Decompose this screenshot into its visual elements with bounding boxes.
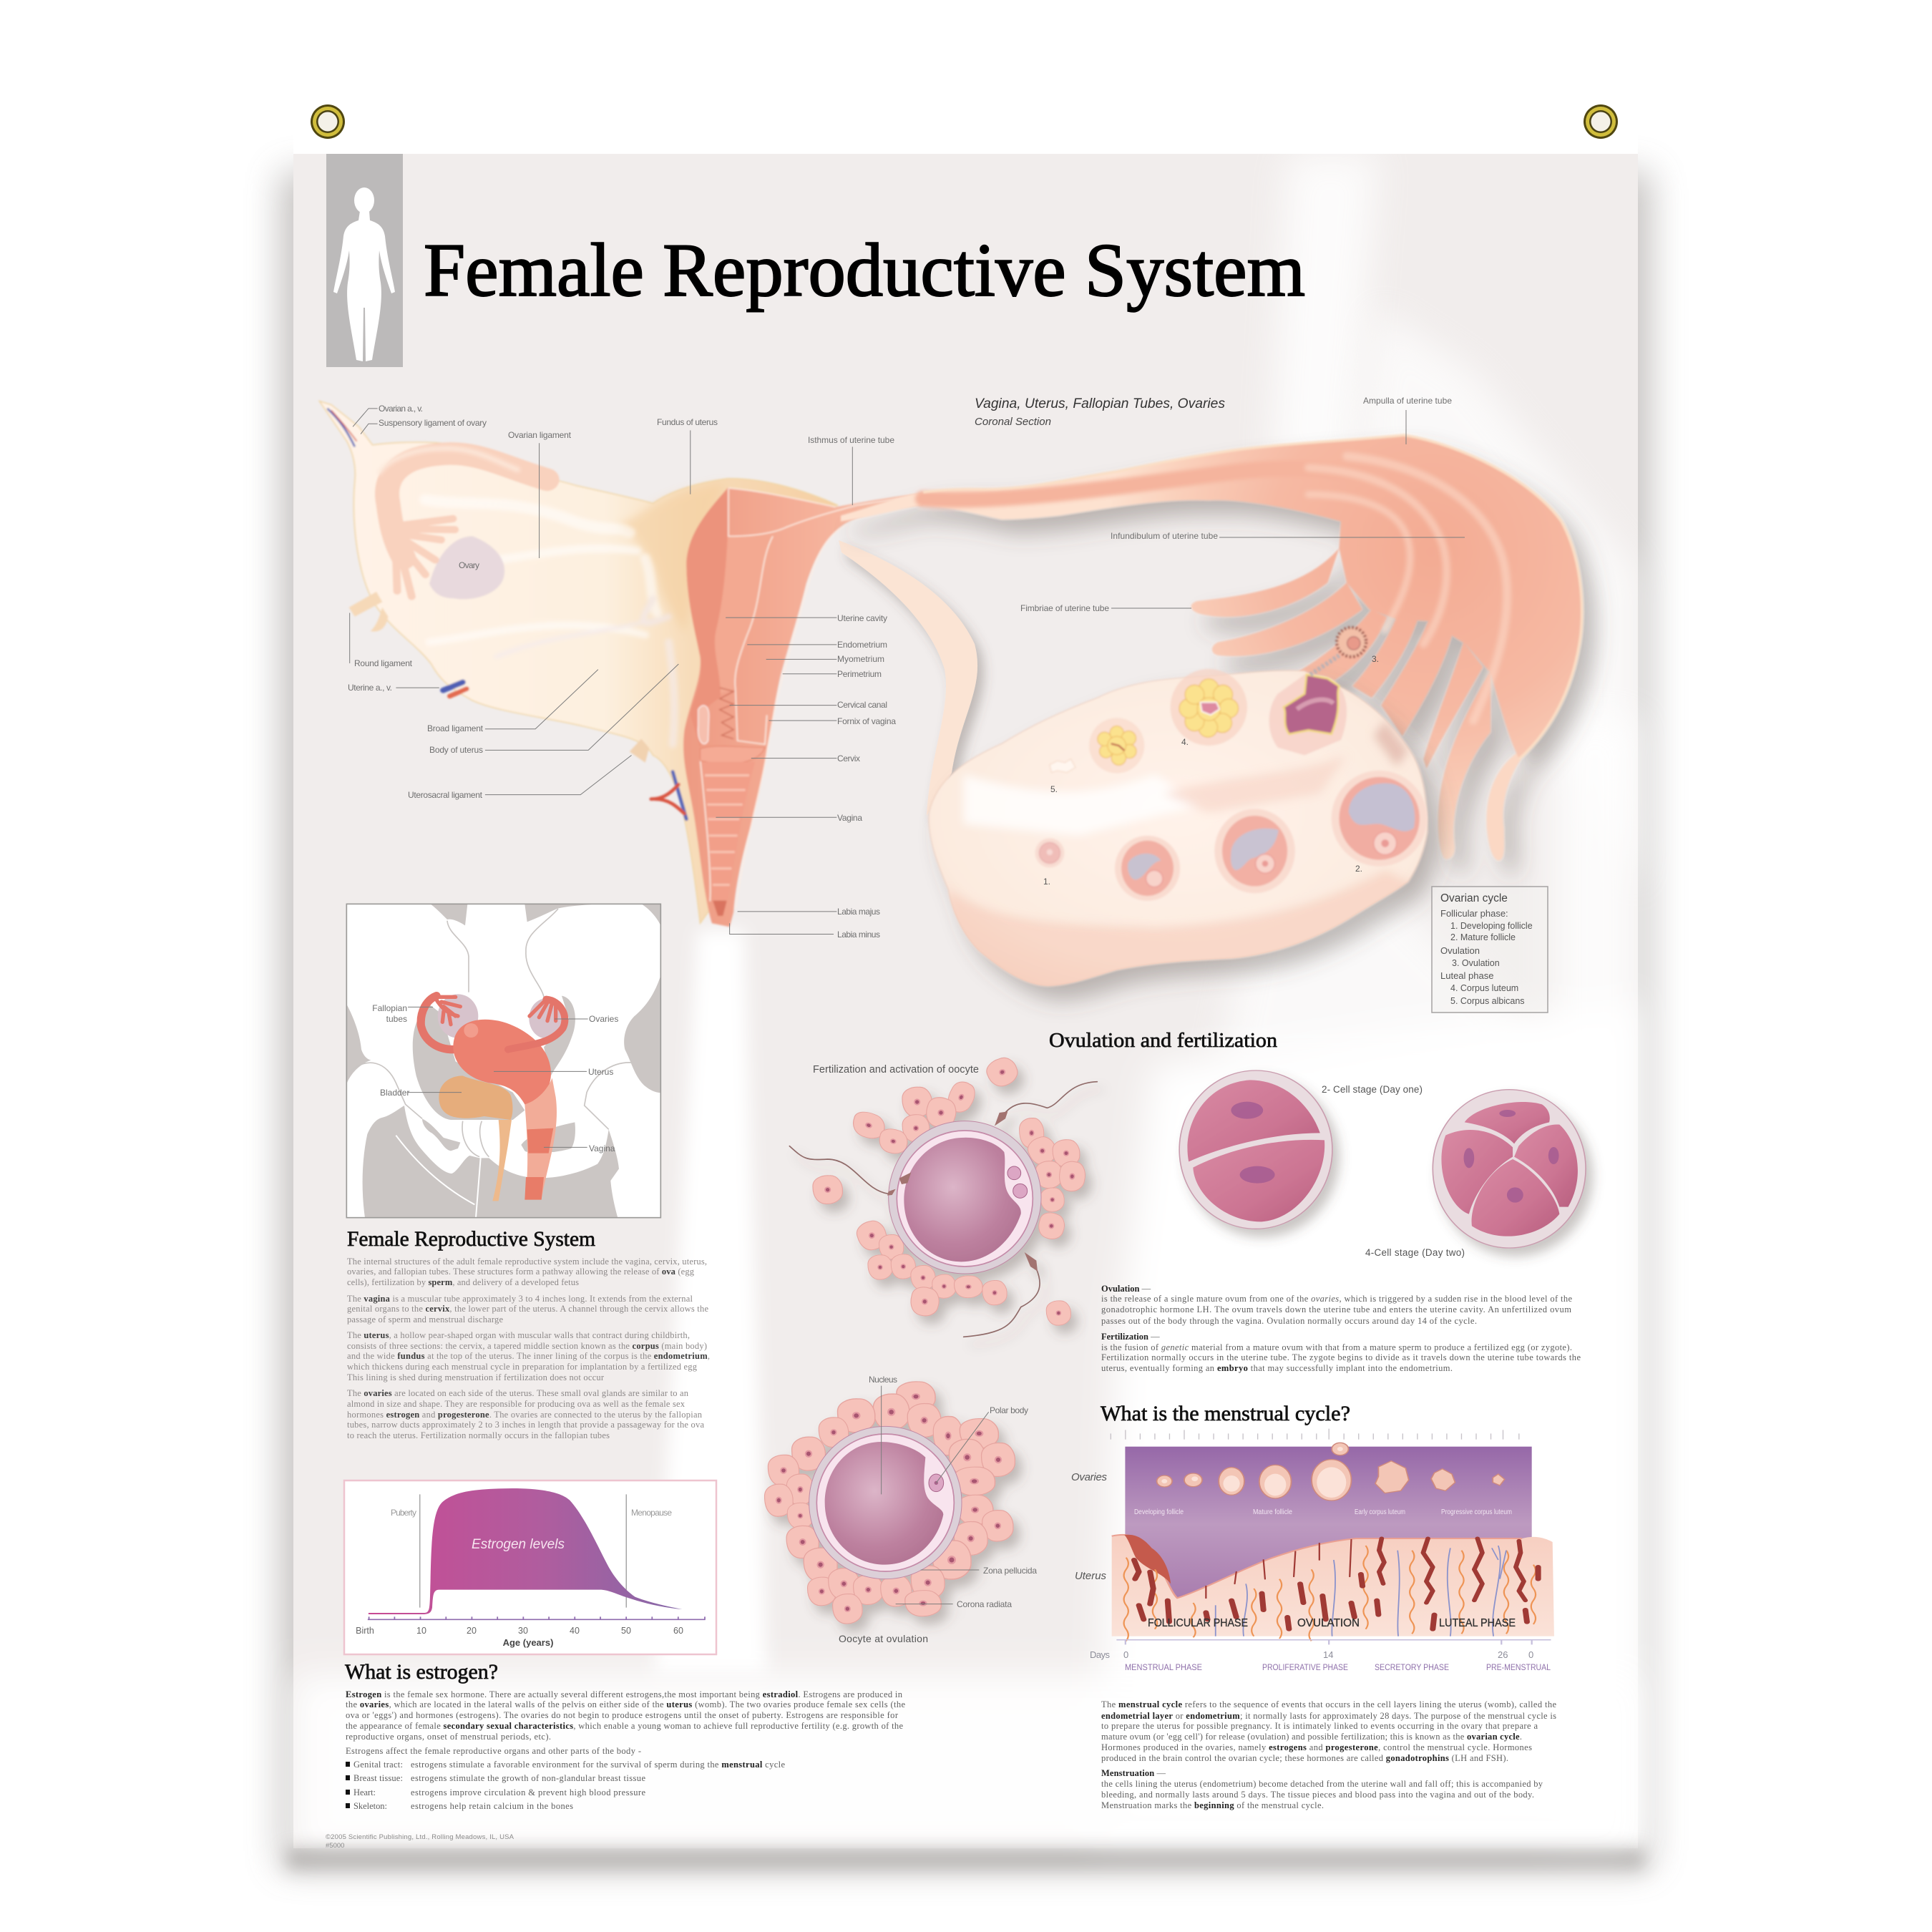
heading: menstrual cycle: What is the menstrual cycle? <box>1101 1402 1350 1425</box>
row labels: Uterus <box>1075 1570 1106 1582</box>
corpus luteum large <box>1171 669 1247 746</box>
labels: uterus diagram <box>348 404 896 940</box>
copyright: #5000 <box>326 1842 344 1850</box>
illustration: oocyte at ovulation <box>765 1382 1015 1624</box>
inset labels: tubes <box>386 1014 407 1024</box>
inset labels: Uterus <box>588 1067 613 1077</box>
bottom edge shadow <box>286 1848 1645 1870</box>
day ticks <box>1111 1429 1519 1440</box>
ovary band <box>1125 1447 1532 1601</box>
text block: overview: The vagina is a muscular tube approximately 3 to 4 inches long. It extends from the external <box>347 1294 693 1304</box>
copyright <box>326 1833 514 1850</box>
corona radiata cells <box>765 1382 1015 1624</box>
body silhouette panel <box>326 154 403 367</box>
chart: estrogen levels: Age (years) <box>503 1637 553 1648</box>
finger 5 <box>1381 619 1452 736</box>
ovum <box>1337 628 1366 657</box>
chart labels: 60 <box>673 1626 683 1636</box>
text block: overview: consists of three sections: the cervix, a tapered middle section known as the corpus (main body) <box>347 1341 707 1351</box>
title: Female Reproductive System <box>424 228 1305 312</box>
axis <box>368 1616 706 1619</box>
tube inner band <box>923 469 1377 499</box>
text block: overview: almond in size and shape. They are responsible for producing ova as well as the female sex <box>347 1399 686 1409</box>
follicle labels <box>1134 1508 1512 1516</box>
text block: ovulation and fertilization: Fertilization normally occurs in the uterine tube. The zygote begins to divide as it travels down the uterine tube towards the <box>1101 1352 1581 1362</box>
labels: uterus diagram: Uterine cavity <box>837 613 887 623</box>
illustration: 2-cell embryo <box>1179 1070 1332 1229</box>
chart: estrogen levels: Puberty <box>391 1508 416 1518</box>
legend: ovarian cycle: Follicular phase: <box>1440 908 1508 919</box>
uterine vessels <box>443 682 467 696</box>
labels: uterus diagram: Uterine a., v. <box>348 683 392 693</box>
text block: overview: This lining is shed during menstruation if fertilization does not occur <box>347 1372 605 1382</box>
follicle labels: Developing follicle <box>1134 1508 1184 1516</box>
text block: overview: passage of sperm and menstrual discharge <box>347 1314 503 1324</box>
text block: menstrual cycle: Menstruation — <box>1101 1768 1166 1778</box>
phase labels: OVULATION <box>1297 1617 1360 1629</box>
cycle phases: SECRETORY PHASE <box>1375 1664 1449 1672</box>
text block: ovulation and fertilization: Fertilization — <box>1101 1332 1160 1342</box>
ovary numbers: 4. <box>1181 737 1189 747</box>
labia <box>713 901 727 916</box>
finger 4 <box>1352 617 1418 698</box>
legend: ovarian cycle: 1. Developing follicle <box>1450 921 1533 931</box>
labels: uterus diagram: Fornix of vagina <box>837 716 896 726</box>
polar body <box>929 1474 944 1492</box>
zona <box>809 1426 962 1579</box>
labels: uterus diagram: Ovarian a., v. <box>379 404 423 414</box>
tube leader lines <box>1111 410 1465 608</box>
embryo labels <box>1322 1084 1465 1258</box>
chart labels: 30 <box>518 1626 528 1636</box>
text block: menstrual cycle: to prepare the uterus for possible pregnancy. It is intimately linked to events occurring in the ovary that prepare a <box>1101 1721 1538 1731</box>
follicles <box>1157 1443 1505 1501</box>
blue vessels <box>1216 1546 1506 1636</box>
text block: overview: which thickens during each menstrual cycle in preparation for implantation by a fertilized egg <box>347 1362 698 1372</box>
sperm <box>789 1082 1097 1337</box>
phase labels: LUTEAL PHASE <box>1439 1617 1516 1629</box>
bullet list: estrogen effects: estrogens improve circulation & prevent high blood pressure <box>411 1787 645 1797</box>
heading: what is estrogen: What is estrogen? <box>345 1661 498 1684</box>
follicle labels: Progressive corpus luteum <box>1441 1508 1512 1516</box>
text block: ovulation and fertilization: uterus, eventually forming an embryo that may successfully implant into the endometrium. <box>1101 1363 1453 1373</box>
text block: menstrual cycle: Hormones produced in the ovaries, namely estrogens and progesterone, control the menstrual cycle. Hormones <box>1101 1742 1532 1752</box>
heading: ovulation and fertilization: Ovulation and fertilization <box>1049 1029 1278 1052</box>
poster sheet <box>293 100 1638 1860</box>
text block: ovulation and fertilization: passes out of the body through the vagina. Ovulation normally occurs around day 14 of the cycle. <box>1101 1316 1477 1326</box>
inset labels <box>372 1003 618 1153</box>
text block: menstrual cycle: endometrial layer or endometrium; it normally lasts for approximately 28 days. The purpose of the menstrual cycle is <box>1101 1711 1556 1721</box>
ligament stub lower <box>630 739 649 763</box>
uterine tissue <box>1112 1535 1554 1636</box>
ruptured follicle <box>1269 675 1347 755</box>
day labels: 26 <box>1498 1649 1508 1660</box>
labels: uterus diagram: Ovarian ligament <box>508 430 572 440</box>
text block: overview: genital organs to the cervix, the lower part of the uterus. A channel through the cervix allows the <box>347 1304 708 1314</box>
tube labels: Infundibulum of uterine tube <box>1111 531 1218 541</box>
shedding lining <box>1125 1535 1171 1584</box>
text block: menstrual cycle: the cells lining the uterus (endometrium) become detached from the uterine wall and fall off; this is accompanied by <box>1101 1779 1543 1789</box>
inset labels: Ovaries <box>589 1014 618 1024</box>
ovary follicles <box>1035 628 1428 901</box>
bullet list: estrogen effects: estrogens help retain calcium in the bones <box>411 1801 573 1811</box>
section note: Coronal Section <box>975 416 1051 428</box>
legend: ovarian cycle: Luteal phase <box>1440 970 1493 981</box>
text block: overview: to reach the uterus. Fertilization normally occurs in the fallopian tubes <box>347 1430 610 1440</box>
subtitle: Vagina, Uterus, Fallopian Tubes, Ovaries <box>975 396 1225 411</box>
phase labels <box>1148 1617 1516 1629</box>
labels: uterus diagram: Uterosacral ligament <box>408 790 483 800</box>
follicle details <box>1161 1447 1346 1498</box>
chart: estrogen levels: Menopause <box>631 1508 672 1518</box>
oocyte labels: Oocyte at ovulation <box>839 1633 928 1644</box>
text block: estrogen: the appearance of female secondary sexual characteristics, which enable a young woman to achieve full reproductive fertility (e.g. growth of the <box>346 1721 903 1731</box>
tube labels: Fimbriae of uterine tube <box>1020 603 1109 613</box>
text block: menstrual cycle: Menstruation marks the beginning of the menstrual cycle. <box>1101 1800 1324 1810</box>
bullet list: estrogen effects: Heart: <box>353 1787 376 1797</box>
left tube and fimbriae <box>387 454 547 597</box>
follicle mid <box>1214 809 1295 893</box>
uterus leader lines <box>350 409 852 935</box>
text block: overview: and the wide fundus at the top of the uterus. The inner lining of the corpus is the endometrium, <box>347 1351 710 1361</box>
day labels <box>1090 1649 1533 1660</box>
oocyte labels: Polar body <box>990 1405 1028 1415</box>
bullet list: estrogen effects: estrogens stimulate the growth of non-glandular breast tissue <box>411 1773 645 1783</box>
oocyte labels: Zona pellucida <box>983 1566 1037 1576</box>
labels: uterus diagram: Broad ligament <box>427 723 484 733</box>
row labels <box>1071 1471 1108 1582</box>
chart labels: Birth <box>356 1626 374 1636</box>
bullet list: estrogen effects <box>346 1760 785 1811</box>
inset frame <box>346 904 660 1218</box>
text block: estrogen <box>346 1689 905 1756</box>
legend: ovarian cycle: 5. Corpus albicans <box>1450 996 1525 1006</box>
endometrium lines <box>701 488 923 909</box>
text block: ovulation and fertilization: is the release of a single mature ovum from one of the ovaries, which is triggered by a sudden rise in the blood level of the <box>1101 1294 1572 1304</box>
ligament fibres <box>426 499 674 744</box>
text block: menstrual cycle <box>1101 1699 1556 1810</box>
oocyte labels <box>839 1375 1037 1644</box>
cervix <box>701 746 765 763</box>
illustration: fallopian tube and fimbriae <box>841 435 1582 861</box>
lower vessels <box>651 771 686 819</box>
illustration: uterus and broad ligament <box>319 401 923 927</box>
labels: uterus diagram: Suspensory ligament of ovary <box>379 418 487 428</box>
vagina <box>525 1078 557 1200</box>
follicle labels: Early corpus luteum <box>1355 1508 1405 1516</box>
grommet left <box>311 104 345 139</box>
bullet list: estrogen effects: Breast tissue: <box>353 1773 403 1783</box>
text block: menstrual cycle: mature ovum (or 'egg cell') for release (ovulation) and possible fertilization; this is known as the ovarian cycle. <box>1101 1732 1522 1742</box>
legend: ovarian cycle: Ovulation <box>1440 945 1480 956</box>
text block: estrogen: ova or 'eggs') and hormones (estrogens). The ovaries do not begin to produce estrogens until the onset of puberty. Estrogens are responsible for <box>346 1710 899 1720</box>
ovary numbers: 1. <box>1043 877 1050 887</box>
labels: uterus diagram: Perimetrium <box>837 669 882 679</box>
tube labels: Ampulla of uterine tube <box>1363 396 1452 406</box>
estrogen curve <box>369 1488 682 1614</box>
text block: estrogen: Estrogens affect the female reproductive organs and other parts of the body - <box>346 1746 641 1756</box>
bullet list: estrogen effects: Skeleton: <box>353 1801 387 1811</box>
labels: uterus diagram: Round ligament <box>354 658 413 668</box>
embryo labels: 4-Cell stage (Day two) <box>1365 1247 1465 1258</box>
developing follicle <box>1035 839 1064 867</box>
illustration: fertilization of oocyte <box>789 1054 1097 1337</box>
chart labels: 50 <box>621 1626 631 1636</box>
labels: uterus diagram: Ovary <box>459 560 479 570</box>
labels: uterus diagram: Fundus of uterus <box>657 417 718 427</box>
outer pale edge <box>923 435 1582 759</box>
label: fertilization: Fertilization and activation of oocyte <box>813 1064 979 1075</box>
finger 1 <box>1191 548 1339 617</box>
ovary small <box>429 536 504 599</box>
labels: uterus diagram: Vagina <box>837 813 862 823</box>
cycle phases <box>1125 1664 1551 1672</box>
text block: estrogen: the ovaries, which are located in the lateral walls of the pelvis on either side of the uterus (womb). The two ovaries produce female sex cells (the <box>346 1699 905 1709</box>
inset labels: Vagina <box>589 1143 615 1153</box>
ooplasm <box>904 1138 1021 1262</box>
illustration: 4-cell embryo <box>1433 1090 1586 1248</box>
finger 6 <box>1423 642 1483 769</box>
round ligament stub <box>349 592 388 632</box>
grommet right <box>1584 104 1618 139</box>
broad ligament <box>319 401 837 923</box>
ovary numbers: 5. <box>1050 784 1058 794</box>
left ovary <box>438 994 478 1038</box>
ovum debris <box>1310 655 1339 675</box>
text block: ovulation and fertilization: gonadotrophic hormone LH. The ovum travels down the uterine tube and enters the uterine cavity. An unfertilized ovum <box>1101 1304 1571 1314</box>
uterus <box>453 1020 551 1109</box>
text block: ovulation and fertilization: Ovulation — <box>1101 1284 1151 1294</box>
labels: uterus diagram: Cervix <box>837 753 860 763</box>
finger 7 <box>1438 670 1491 859</box>
chart labels <box>356 1626 683 1636</box>
axis line <box>1116 1640 1551 1644</box>
tan shading near uterus <box>618 483 723 635</box>
ridges <box>1309 456 1507 721</box>
ovary numbers: 2. <box>1355 864 1362 874</box>
chart labels: 10 <box>416 1626 426 1636</box>
ovary mottling <box>948 721 1423 997</box>
bladder <box>439 1075 512 1120</box>
cycle phases: PRE-MENSTRUAL <box>1486 1664 1551 1672</box>
legend: ovarian cycle: 2. Mature follicle <box>1450 932 1516 942</box>
oocyte labels: Nucleus <box>869 1375 897 1385</box>
finger 3 <box>1293 610 1387 684</box>
ovary numbers <box>1043 654 1379 887</box>
labels: uterus diagram: Isthmus of uterine tube <box>808 435 894 445</box>
text block: estrogen: Estrogen is the female sex hormone. There are actually several different estrogens,the most important being estradiol. Estrogens are produced in <box>346 1689 903 1699</box>
bullet list: estrogen effects: estrogens stimulate a favorable environment for the survival of sperm during the menstrual cycle <box>411 1760 785 1770</box>
ooplasm <box>825 1442 943 1565</box>
chart: estrogen levels: Estrogen levels <box>472 1537 565 1552</box>
text block: menstrual cycle: produced in the brain control the ovarian cycle; these hormones are called gonadotrophins (LH and FSH). <box>1101 1753 1508 1763</box>
text block: overview: The ovaries are located on each side of the uterus. These small oval glands are similar to an <box>347 1388 689 1398</box>
inset leader lines <box>408 1007 588 1147</box>
cervical canal folds <box>720 688 733 739</box>
polar bodies <box>1008 1166 1028 1198</box>
text block: overview: cells), fertilization by sperm, and delivery of a developed fetus <box>347 1277 579 1287</box>
left tube <box>421 996 460 1050</box>
ovarian ligament band <box>839 540 977 816</box>
day labels: Days <box>1090 1649 1111 1660</box>
follicle labels: Mature follicle <box>1253 1508 1292 1516</box>
mature follicle <box>1332 771 1428 867</box>
day labels: 0 <box>1528 1649 1533 1660</box>
right ovary <box>529 998 563 1038</box>
text block: overview <box>347 1257 710 1440</box>
chart: menstrual cycle <box>1111 1429 1554 1644</box>
embryo labels: 2- Cell stage (Day one) <box>1322 1084 1423 1095</box>
age markers <box>420 1494 626 1608</box>
text block: overview: The internal structures of the adult female reproductive system include the vagina, cervix, uterus, <box>347 1257 707 1267</box>
vagina rugae <box>702 762 755 899</box>
text block: ovulation and fertilization <box>1101 1284 1581 1373</box>
heading: female reproductive system: Female Reproductive System <box>347 1228 595 1251</box>
text block: overview: The uterus, a hollow pear-shaped organ with muscular walls that contract during childbirth, <box>347 1330 690 1340</box>
legend: ovarian cycle: 4. Corpus luteum <box>1450 983 1518 993</box>
zona pellucida <box>889 1121 1041 1274</box>
urethra <box>492 1120 512 1201</box>
labels: uterus diagram: Cervical canal <box>837 700 887 710</box>
corpus luteum small <box>1089 718 1144 774</box>
inset labels: Fallopian <box>372 1003 407 1013</box>
finger 2 <box>1212 582 1362 656</box>
legend: ovarian cycle: Ovarian cycle <box>1440 892 1508 904</box>
day labels: 14 <box>1323 1649 1333 1660</box>
day labels: 0 <box>1123 1649 1128 1660</box>
chart labels: 20 <box>467 1626 477 1636</box>
outline curves <box>351 909 632 1157</box>
tube labels <box>1020 396 1452 613</box>
follicle early <box>1115 836 1180 901</box>
text block: overview: ovaries, and fallopian tubes. These structures form a pathway allowing the release of ova (egg <box>347 1267 695 1277</box>
pelvic bones <box>346 904 660 1218</box>
inset: pelvis diagram <box>346 904 660 1218</box>
chart: estrogen levels <box>344 1480 716 1654</box>
labels: uterus diagram: Body of uterus <box>429 745 483 755</box>
text block: menstrual cycle: The menstrual cycle refers to the sequence of events that occurs in the cell layers lining the uterus (womb), called the <box>1101 1699 1556 1709</box>
text block: menstrual cycle: bleeding, and normally lasts around 5 days. The tissue pieces and blood pass into the vagina and out of the body. <box>1101 1790 1534 1800</box>
text block: overview: tubes, narrow ducts approximately 2 to 3 inches in length that provide a passageway for the ova <box>347 1420 704 1430</box>
fornix <box>698 706 709 744</box>
labels: uterus diagram: Labia majus <box>837 907 880 917</box>
corona cells <box>813 1054 1088 1325</box>
uterus section wall <box>683 488 923 927</box>
phase labels: FOLLICULAR PHASE <box>1148 1617 1248 1629</box>
illustration: ovary <box>929 670 1428 986</box>
orange vessels <box>1124 1546 1536 1641</box>
sperm heads <box>887 1111 1038 1272</box>
oocyte labels: Corona radiata <box>957 1599 1012 1609</box>
oocyte leader lines <box>882 1386 989 1604</box>
right tube <box>508 1000 565 1050</box>
left dark wall <box>686 488 728 748</box>
finger 8 <box>1486 751 1527 861</box>
cycle phases: PROLIFERATIVE PHASE <box>1262 1664 1348 1672</box>
labels: uterus diagram: Endometrium <box>837 640 887 650</box>
chart labels: 40 <box>570 1626 580 1636</box>
labels: uterus diagram: Labia minus <box>837 930 880 940</box>
poster shadow <box>280 172 1651 1868</box>
row labels: Ovaries <box>1071 1471 1108 1483</box>
inset labels: Bladder <box>380 1088 409 1098</box>
suspensory vessels <box>327 409 357 447</box>
text block: overview: hormones estrogen and progesterone. The ovaries are connected to the uterus by the fallopian <box>347 1410 703 1420</box>
labels: uterus diagram: Myometrium <box>837 654 884 664</box>
bullet list: estrogen effects: Genital tract: <box>353 1760 403 1770</box>
legend: ovarian cycle <box>1432 887 1548 1013</box>
text block: estrogen: reproductive organs, onset of menstrual periods, etc). <box>346 1732 551 1742</box>
copyright: ©2005 Scientific Publishing, Ltd., Rolling Meadows, IL, USA <box>326 1833 514 1841</box>
uterine cavity <box>715 535 773 693</box>
ovary numbers: 3. <box>1372 654 1379 664</box>
corpus albicans <box>1050 759 1075 772</box>
text block: ovulation and fertilization: is the fusion of genetic material from a mature ovum with that from a mature sperm to produce a fertilized egg (or zygote). <box>1101 1342 1572 1352</box>
tube and infundibulum <box>841 435 1582 759</box>
legend: ovarian cycle: 3. Ovulation <box>1452 958 1500 968</box>
cycle phases: MENSTRUAL PHASE <box>1125 1664 1202 1672</box>
endometrial glands <box>1134 1538 1538 1629</box>
